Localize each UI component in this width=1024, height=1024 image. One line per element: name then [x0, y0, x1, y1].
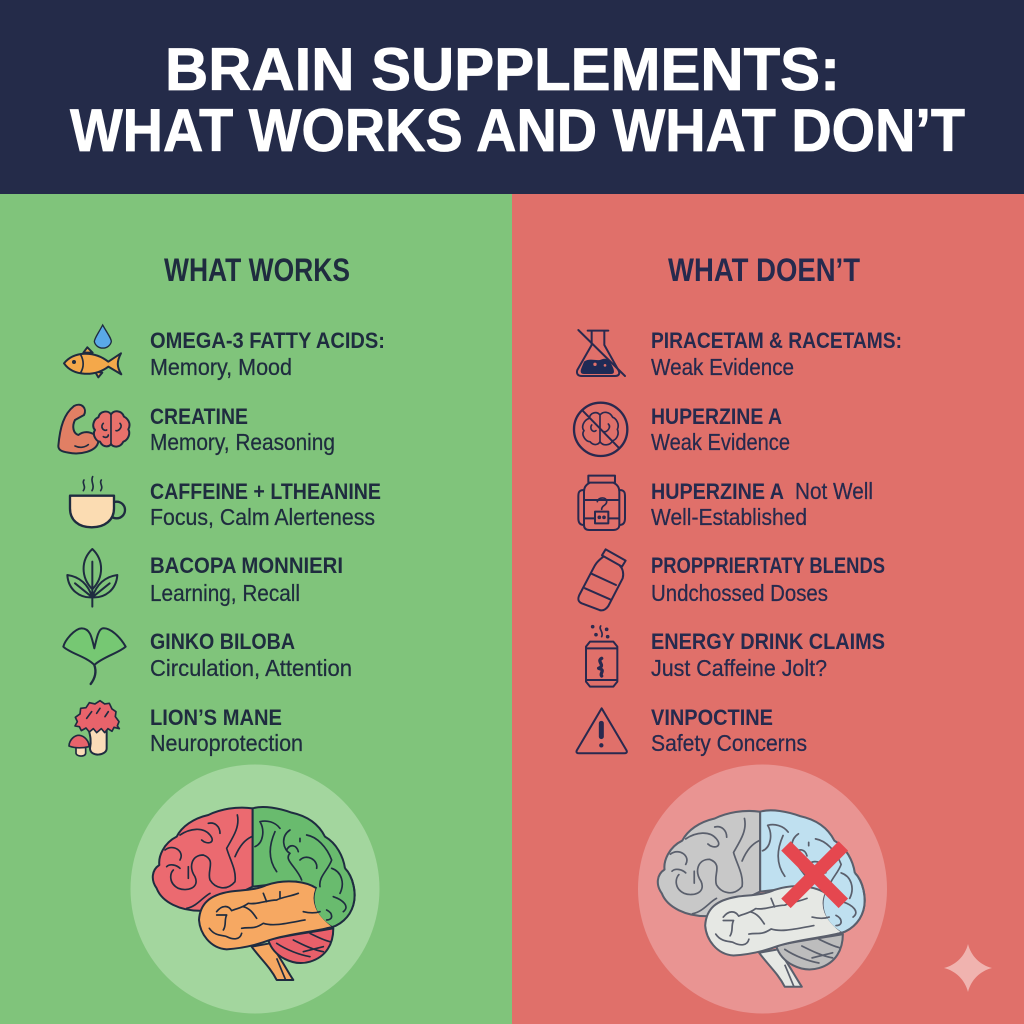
item: caffeine + l-theanine: Focus, Calm Alerteness: [150, 504, 375, 530]
item: omega-3: [150, 328, 385, 380]
item: bacopa: BACOPA MONNIERI: [150, 553, 343, 578]
item: creatine: Memory, Reasoning: [150, 429, 335, 455]
heading: what doen't: WHAT DOEN’T: [668, 252, 860, 288]
item: vinpocetine: VINPOCTINE: [651, 705, 773, 730]
item: vinpocetine: [651, 705, 807, 756]
icon: muscle and brain: [58, 405, 130, 453]
icon: lion's mane mushroom: [69, 701, 119, 756]
item: huperzine a not well established: Well-Established: [651, 504, 807, 530]
item: energy drink claims: Just Caffeine Jolt?: [651, 655, 827, 681]
item: proprietary blends: Undchossed Doses: [651, 580, 828, 606]
item: energy drink claims: [651, 629, 885, 681]
item: piracetam: [651, 328, 902, 380]
icon: sparkle: [944, 944, 992, 992]
title: [70, 36, 965, 164]
panel: what works: [0, 194, 512, 1024]
item: huperzine a: HUPERZINE A: [651, 404, 782, 429]
item: caffeine + l-theanine: [150, 479, 381, 530]
item: caffeine + l-theanine: CAFFEINE + LTHEANINE: [150, 479, 381, 504]
item: piracetam: Weak Evidence: [651, 354, 794, 380]
title: BRAIN SUPPLEMENTS:: [165, 36, 840, 103]
item: creatine: [150, 404, 335, 455]
item: huperzine a not well established: HUPERZINE A: [651, 479, 784, 504]
icon: tilted bottle: [578, 549, 626, 610]
item: proprietary blends: PROPPRIERTATY BLENDS: [651, 553, 885, 578]
item: huperzine a not well established: Not Well: [795, 478, 873, 504]
icon: crossed-out flask: [577, 330, 625, 376]
icon: energy drink can: [586, 626, 617, 687]
heading: what works: WHAT WORKS: [164, 252, 350, 288]
item: huperzine a not well established: [651, 478, 873, 530]
item: huperzine a: Weak Evidence: [651, 429, 790, 455]
item: ginkgo: Circulation, Attention: [150, 655, 352, 681]
circle behind crossed-out brain: [638, 764, 887, 1014]
item: omega-3: Memory, Mood: [150, 354, 292, 380]
title: WHAT WORKS AND WHAT DON’T: [70, 97, 965, 164]
icon: coffee cup: [70, 477, 125, 527]
item: omega-3: OMEGA-3 FATTY ACIDS:: [150, 328, 385, 353]
illustration: colourful brain: [153, 807, 355, 980]
item: bacopa: Learning, Recall: [150, 580, 300, 606]
item: creatine: CREATINE: [150, 404, 248, 429]
icon: mystery supplement jar: [578, 476, 625, 530]
item: proprietary blends: [651, 553, 885, 606]
item: piracetam: PIRACETAM & RACETAMS:: [651, 328, 902, 353]
item: bacopa: [150, 553, 343, 606]
panel: what doesn't: [512, 194, 1024, 1024]
item: ginkgo: GINKO BILOBA: [150, 629, 295, 654]
item: huperzine a: [651, 404, 790, 455]
item: ginkgo: [150, 629, 352, 681]
item: vinpocetine: Safety Concerns: [651, 730, 807, 756]
icon: fish and drop: [64, 325, 121, 377]
circle behind healthy brain: [130, 764, 380, 1014]
icon: crossed-out brain: [574, 403, 627, 456]
item: lion's mane: Neuroprotection: [150, 730, 303, 756]
illustration: grey brain with red cross: [658, 810, 865, 987]
icon: warning triangle: [576, 708, 627, 753]
item: energy drink claims: ENERGY DRINK CLAIMS: [651, 629, 885, 654]
icon: ginkgo leaf: [63, 628, 126, 684]
item: lion's mane: [150, 705, 303, 756]
grey brain: [658, 810, 865, 987]
red cross: [791, 851, 839, 899]
icon: bacopa leaves: [67, 549, 117, 607]
item: lion's mane: LION’S MANE: [150, 705, 282, 730]
header banner: [0, 0, 1024, 194]
